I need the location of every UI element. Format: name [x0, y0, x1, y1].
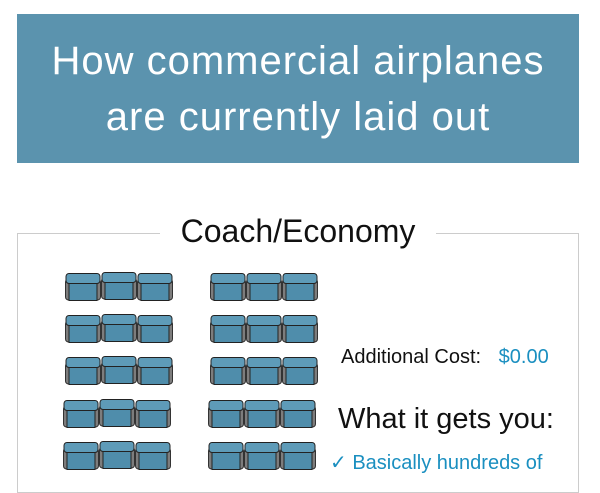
- title banner: [17, 14, 579, 163]
- panel: coach/economy: [17, 233, 579, 493]
- title banner: How commercial airplanes: [51, 39, 545, 83]
- additional cost text: Additional Cost: $0.00: [341, 346, 549, 368]
- title banner: are currently laid out: [106, 95, 490, 139]
- panel heading: Coach/Economy: [181, 213, 415, 249]
- benefit item: ✓ Basically hundreds of: [330, 452, 542, 474]
- what it gets you heading: What it gets you:: [338, 403, 554, 435]
